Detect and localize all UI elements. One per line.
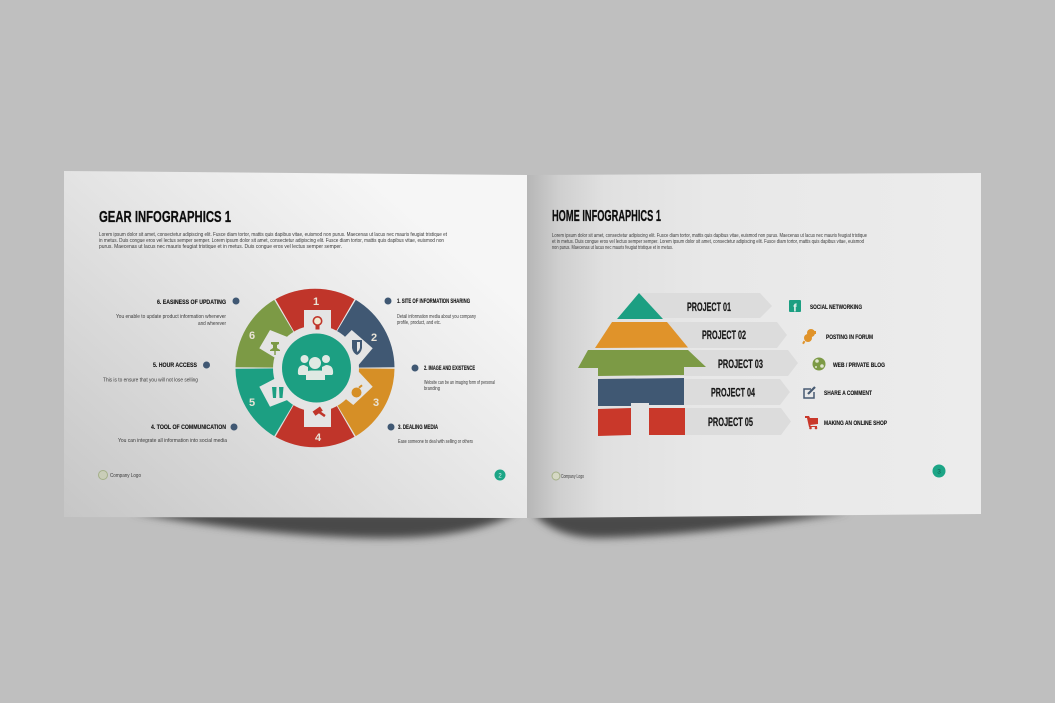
label: posting in forum: POSTING IN FORUM [826,335,873,341]
label: image and existence [412,364,495,392]
page number 2 [494,470,506,480]
arrow: project 03 [680,350,798,376]
company logo: left page [98,470,141,480]
icon: edit [804,387,815,398]
icon: gavel [313,406,326,417]
segment 6 [236,300,315,368]
arrow: project 02 [660,322,787,348]
label: making an online shop: MAKING AN ONLINE SHOP [824,421,887,427]
icon: light bulb [313,317,322,330]
label: tool of communication: 4. TOOL OF COMMUNICATION [151,425,226,431]
book shadow [130,512,850,538]
segment 4 [276,368,354,447]
label: share a comment: SHARE A COMMENT [824,391,872,397]
title: home infographics: HOME INFOGRAPHICS 1 [552,208,661,225]
label: site of information sharing [384,298,476,326]
segment 2 [315,300,394,368]
gear body [259,310,373,427]
label: site of information sharing: profile, product, and etc. [397,320,441,326]
label: dealing media: Ease someone to deal with selling or others [398,439,473,445]
label: tool of communication [118,424,238,444]
gear hub [282,334,351,402]
page number 3: 3 [937,468,941,476]
arrow: project 04: PROJECT 04 [711,388,755,400]
icon: bomb [352,384,363,398]
label: tool of communication: You can integrate all information into social media [118,438,227,444]
right page [527,173,981,518]
label: hour access [103,362,210,384]
label: hour access: This is to ensure that you will not lose selling [103,378,198,384]
label: image and existence: 2. IMAGE AND EXISTENCE [424,366,475,372]
segment numbers: 4 [315,432,322,444]
label: image and existence: branding [424,386,440,392]
base left [598,408,631,436]
left page [64,171,527,518]
segment 3 [315,368,394,436]
arrow: project 03: PROJECT 03 [718,359,763,371]
title: gear infographics: GEAR INFOGRAPHICS 1 [99,209,231,226]
label: image and existence: Website can be an imaging form of personal [424,380,495,386]
arrow: project 05 [680,408,791,435]
segment numbers: 2 [371,332,377,344]
intro text: right page: Lorem ipsum dolor sit amet, consectetur adipiscing elit. Fusce diam tortor, mattis quis dapibus vitae, euismod non purus. Maecenas ut lacus nec mauris feugiat tristique [552,233,867,239]
arrow: project 04 [680,379,790,405]
label: hour access: 5. HOUR ACCESS [153,363,197,369]
icon: cart [805,416,818,429]
company logo: left page: Company Logo [110,473,141,479]
segment numbers: 6 [249,330,255,342]
label: easiness of updating: 6. EASINESS OF UPDATING [157,300,226,306]
base right [649,408,685,435]
icon: pushpin [270,342,280,355]
roof tier 2 [595,322,688,348]
page number 3 [932,464,946,478]
house diagram [578,293,706,436]
label: easiness of updating: and wherever [198,321,226,327]
gear infographic [236,289,394,447]
arrow: project 01: PROJECT 01 [687,302,731,314]
roof tier 3 [578,350,706,376]
segment numbers: 1 [313,296,319,308]
roof tier 1 [617,293,663,319]
intro text: left page: purus. Maecenas ut lacus nec mauris feugiat tristique et in metus. Duis congue eros vel lectus semper semper. [99,244,342,250]
company logo: right page [552,472,584,480]
segment 5 [236,368,315,436]
label: easiness of updating: You enable to update product information whenever [116,314,226,320]
page number 2: 2 [498,474,502,480]
intro text: right page: non purus. Maecenas ut lacus nec mauris feugiat tristique et in metus. [552,245,673,251]
label: site of information sharing: Detail information media about you company [397,314,476,320]
intro text: right page [552,233,867,251]
label: site of information sharing: 1. SITE OF INFORMATION SHARING [397,299,470,305]
arrow: project 02: PROJECT 02 [702,330,746,342]
segment numbers: 3 [373,397,379,409]
label: dealing media [388,424,473,445]
icon: globe [812,358,826,370]
icon: facebook [789,300,801,314]
label: easiness of updating [116,298,240,327]
segment numbers [249,296,379,444]
segment numbers: 5 [249,397,255,409]
wall [598,378,684,406]
intro text: left page: in metus. Duis congue eros vel lectus semper semper. Lorem ipsum dolor sit amet, consectetur adipiscing elit. Fusce diam tortor, mattis quis dapibus vitae, euismod non [99,238,444,244]
icon: people [298,355,333,380]
segment 1 [276,289,354,368]
icon: pin [802,329,816,344]
label: web / private blog: WEB / PRIVATE BLOG [833,363,885,369]
label: social networking: SOCIAL NETWORKING [810,305,862,311]
icon: binoculars [272,387,284,398]
intro text: left page: Lorem ipsum dolor sit amet, consectetur adipiscing elit. Fusce diam tortor, mattis quis dapibus vitae, euismod non purus. Maecenas ut lacus nec mauris feugiat tristique et [99,232,448,238]
intro text: left page [99,232,448,250]
icon: shield [352,340,362,355]
arrow: project 01 [640,293,772,318]
icon: facebook: f [793,302,797,314]
label: dealing media: 3. DEALING MEDIA [398,425,438,431]
company logo: right page: Company Logo [561,474,584,480]
intro text: right page: et in metus. Duis congue eros vel lectus semper semper. Lorem ipsum dolor sit amet, consectetur adipiscing elit. Fusce diam tortor, mattis quis dapibus vitae, euismod [552,239,864,245]
arrow: project 05: PROJECT 05 [708,417,753,429]
